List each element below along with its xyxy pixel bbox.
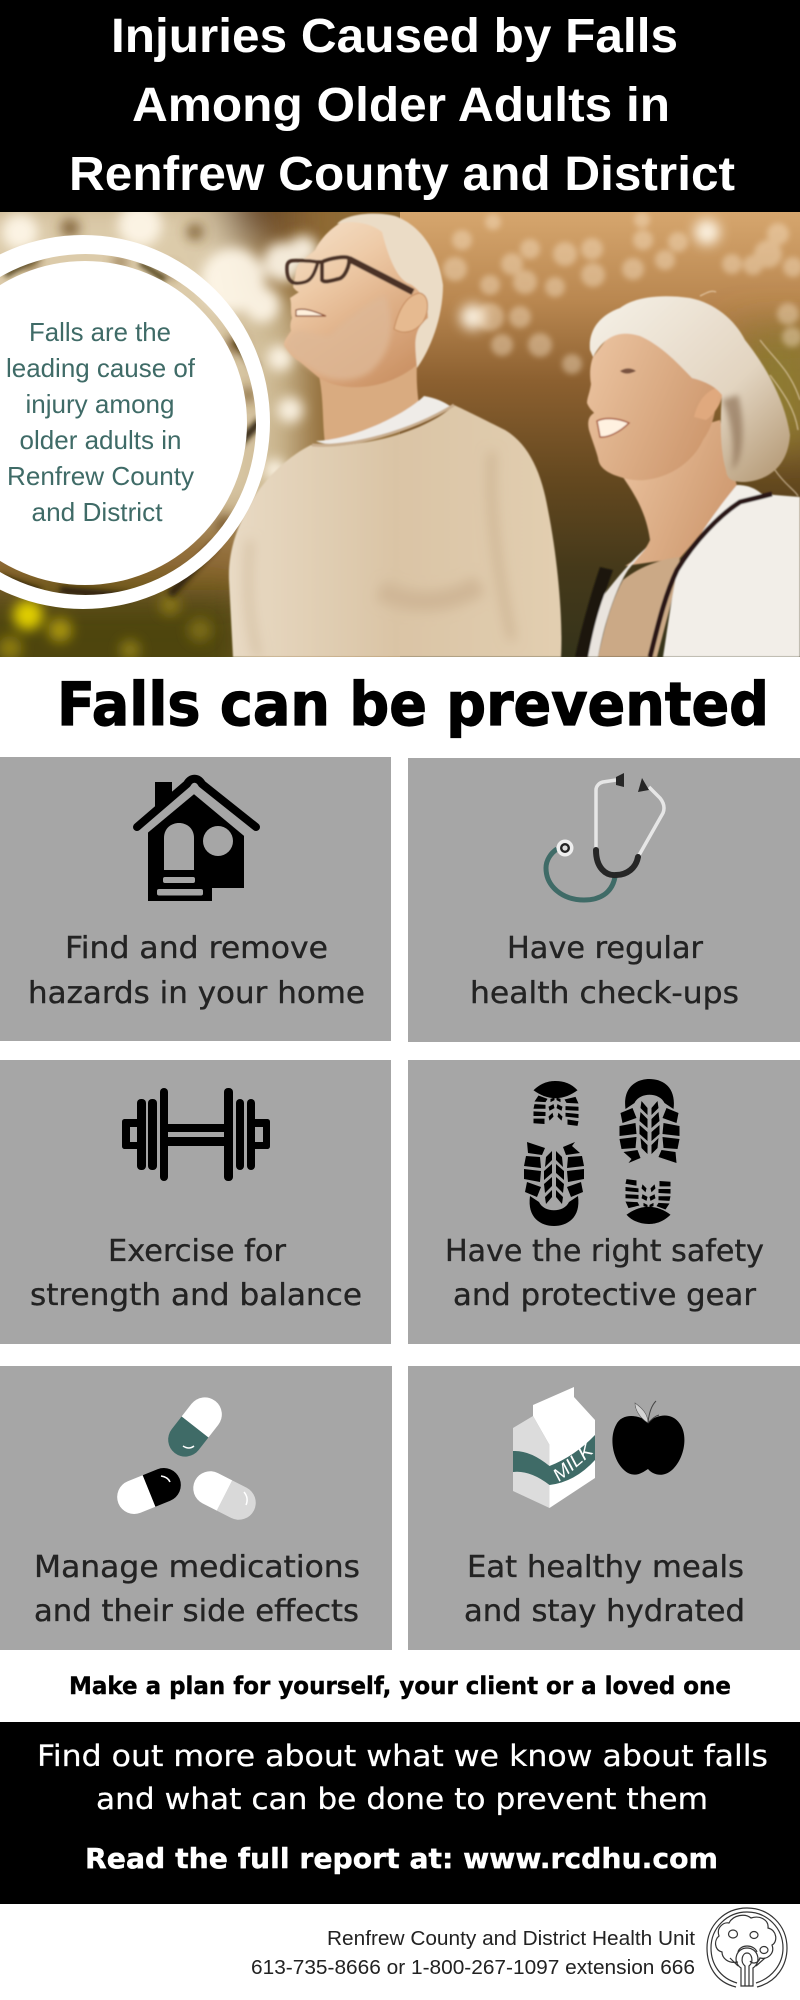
text (470, 931, 739, 1011)
woman: jacket trim (650, 494, 772, 657)
panel: health check-ups (408, 758, 800, 1042)
man (229, 214, 561, 657)
photo: older couple looking up in sunlight (0, 212, 800, 657)
woman: bag strap (575, 567, 613, 657)
panel: medications (0, 1366, 392, 1650)
text: strength and balance (30, 1278, 362, 1313)
man: beard stubble (298, 302, 392, 382)
callout: text (6, 317, 196, 527)
woman: neck and chest (618, 420, 738, 566)
logo: health unit tree (707, 1908, 787, 1987)
text: and their side effects (34, 1594, 359, 1629)
icon: capsules (112, 1391, 262, 1526)
text (464, 1550, 745, 1629)
text: Exercise for (108, 1234, 287, 1269)
text (30, 1234, 362, 1313)
callout: outer white ring (0, 235, 270, 609)
text (445, 1234, 764, 1313)
man: neck (318, 362, 420, 444)
text: Have the right safety (445, 1234, 764, 1269)
callout: text: Renfrew County (7, 461, 194, 491)
title banner: Among Older Adults in (132, 79, 670, 132)
icon: apple (612, 1401, 684, 1475)
woman: eye (620, 368, 636, 374)
text: and protective gear (453, 1278, 757, 1313)
circle callout (0, 235, 270, 609)
footer contact text (251, 1928, 695, 1979)
call-to-action banner: Read the full report at: www.rcdhu.com (85, 1842, 718, 1875)
text: health check-ups (470, 976, 739, 1011)
text (34, 1550, 360, 1629)
text: hazards in your home (28, 976, 365, 1011)
title banner: Renfrew County and District (69, 148, 735, 201)
callout: text: Falls are the (29, 317, 171, 347)
icon: milk carton: MILK (549, 1439, 598, 1485)
callout: text: leading cause of (6, 353, 196, 383)
man: glasses (287, 257, 413, 292)
woman: ear (694, 387, 723, 420)
woman: smile (597, 419, 629, 437)
man: hair (337, 214, 443, 368)
text: Find and remove (65, 931, 328, 966)
callout: inner white disc (0, 261, 247, 585)
woman: flyaway hairs (700, 291, 800, 496)
make a plan line: Make a plan for yourself, your client or a loved one (69, 1672, 731, 1700)
man: mouth (296, 309, 326, 316)
woman: hair (590, 296, 790, 482)
title banner: Injuries Caused by Falls (111, 10, 678, 63)
man: sweater neckline (312, 405, 454, 445)
panel: home hazards (0, 757, 391, 1041)
man: t-shirt collar (316, 396, 450, 444)
panel: exercise (0, 1060, 391, 1344)
icon: stethoscope (546, 773, 664, 900)
title banner (0, 0, 800, 212)
call-to-action banner (0, 1722, 800, 1904)
panel: safety gear (408, 1060, 800, 1344)
text (28, 931, 365, 1011)
text: Have regular (507, 931, 704, 966)
man: ear (394, 293, 428, 332)
woman: jacket (663, 485, 800, 657)
call-to-action banner: and what can be done to prevent them (96, 1782, 708, 1816)
icon: dumbbell (122, 1088, 270, 1181)
text: Eat healthy meals (467, 1550, 744, 1585)
woman: hair shading (722, 395, 743, 470)
text: and stay hydrated (464, 1594, 745, 1629)
icon: boot prints (524, 1079, 680, 1226)
woman: shirt collar (587, 547, 647, 657)
callout: text: injury among (26, 389, 174, 419)
man: face (284, 221, 428, 388)
man: sweater (229, 405, 561, 657)
footer contact text: 613-735-8666 or 1-800-267-1097 extension 666 (251, 1957, 695, 1979)
call-to-action banner: Find out more about what we know about falls (37, 1739, 768, 1773)
callout: text: older adults in (20, 425, 181, 455)
icon: milk carton (513, 1387, 598, 1508)
footer contact text: Renfrew County and District Health Unit (327, 1928, 695, 1950)
woman: shirt (598, 557, 680, 657)
icon: house (137, 779, 256, 901)
callout: text: and District (32, 497, 163, 527)
woman: face (587, 331, 716, 480)
woman (575, 291, 800, 657)
text: Manage medications (34, 1550, 360, 1585)
panel: meals and hydration (408, 1366, 800, 1650)
